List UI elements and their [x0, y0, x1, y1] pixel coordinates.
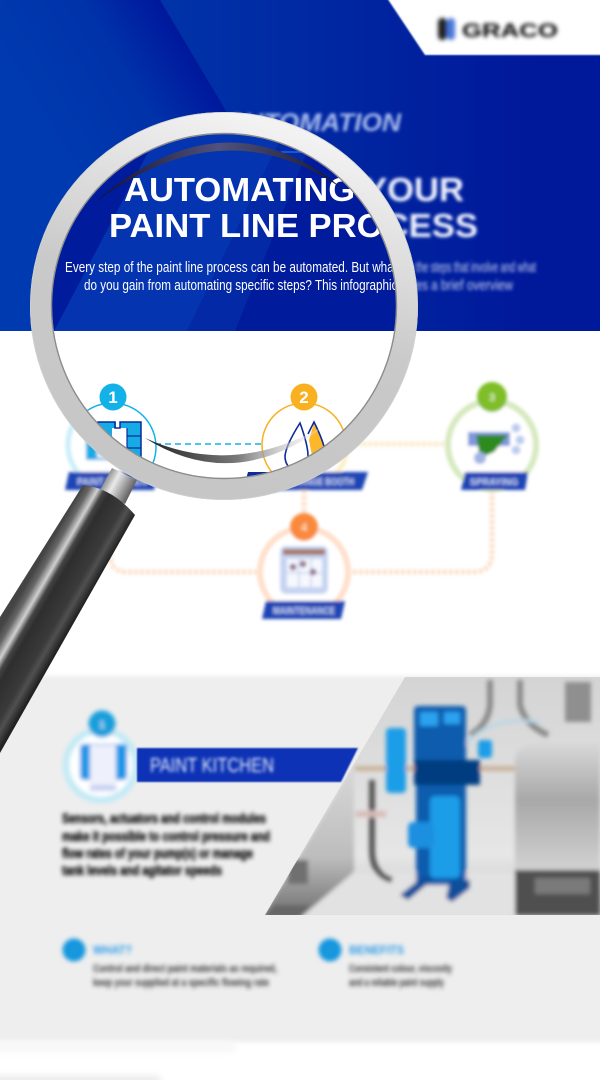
footer hint	[0, 1042, 235, 1080]
photo: pump and tank	[260, 677, 600, 918]
sharp intro text: Every step of the paint line process can be automated. But what	[65, 260, 397, 276]
benefits column: BENEFITS	[349, 943, 404, 957]
sharp step 2 icon	[246, 384, 344, 476]
description text: Sensors, actuators and control modules	[62, 811, 266, 826]
what column: keep your supplied at a specific flowing rate	[93, 977, 269, 989]
logo tab	[385, 0, 600, 55]
title (blurred)	[109, 171, 478, 244]
sharp title	[111, 178, 380, 238]
what column: WHAT?	[93, 943, 132, 957]
magnifier handle	[0, 468, 137, 753]
sharp step 1 icon: 1	[108, 388, 118, 407]
sharp accent line	[281, 151, 302, 153]
description text: tank levels and agitator speeds	[62, 863, 222, 878]
lens reflection: bottom arc	[145, 429, 319, 464]
step 4 icon: MAINTENANCE	[273, 606, 335, 617]
logo tab: GRACO	[462, 21, 558, 42]
step 3 icon	[448, 382, 536, 490]
lens header facets	[54, 134, 306, 331]
step 4 icon: 4	[301, 522, 308, 534]
step 5 icon	[66, 710, 136, 800]
sharp connector	[155, 443, 261, 445]
step 2 icon	[243, 402, 368, 490]
step 2 icon: COLOR CHANGE BOOTH	[258, 477, 354, 488]
eyebrow heading (blurred): AUTOMATION	[224, 109, 402, 137]
benefits column: Consistent colour, viscosity	[349, 963, 453, 975]
section banner	[137, 748, 358, 782]
benefits column	[318, 938, 453, 989]
lens reflection: top arc	[94, 143, 344, 203]
what column	[62, 938, 277, 989]
what column: Control and direct paint materials as required,	[93, 963, 277, 975]
step 5 icon: 1	[99, 720, 105, 731]
header band	[0, 0, 600, 331]
description text	[62, 811, 270, 878]
dotted divider	[62, 912, 600, 918]
sharp step 1 icon	[87, 384, 157, 463]
description text: flow rates of your pump(s) or manage	[62, 846, 253, 861]
sharp title: AUTOMATING YOUR	[124, 171, 464, 208]
title (blurred): PAINT LINE PROCESS	[109, 207, 478, 244]
sharp intro text	[66, 261, 395, 293]
title (blurred): AUTOMATING YOUR	[124, 171, 464, 208]
sharp step 2 icon: 2	[299, 388, 309, 407]
step 4 icon	[260, 513, 348, 619]
lens ring	[30, 112, 418, 500]
intro text (blurred)	[84, 260, 536, 294]
step 3 icon: 3	[489, 392, 495, 404]
magnified area	[52, 134, 395, 476]
benefits column: and a reliable paint supply	[349, 977, 445, 989]
description text: make it possible to control pressure and	[62, 829, 270, 844]
step 1 icon: PAINT KITCHEN	[77, 477, 147, 488]
step 3 icon: SPRAYING	[470, 477, 518, 487]
step 1 icon	[65, 401, 158, 490]
section banner: PAINT KITCHEN	[150, 755, 274, 777]
sharp title: PAINT LINE PROCESS	[109, 207, 478, 244]
process connectors	[110, 444, 492, 572]
